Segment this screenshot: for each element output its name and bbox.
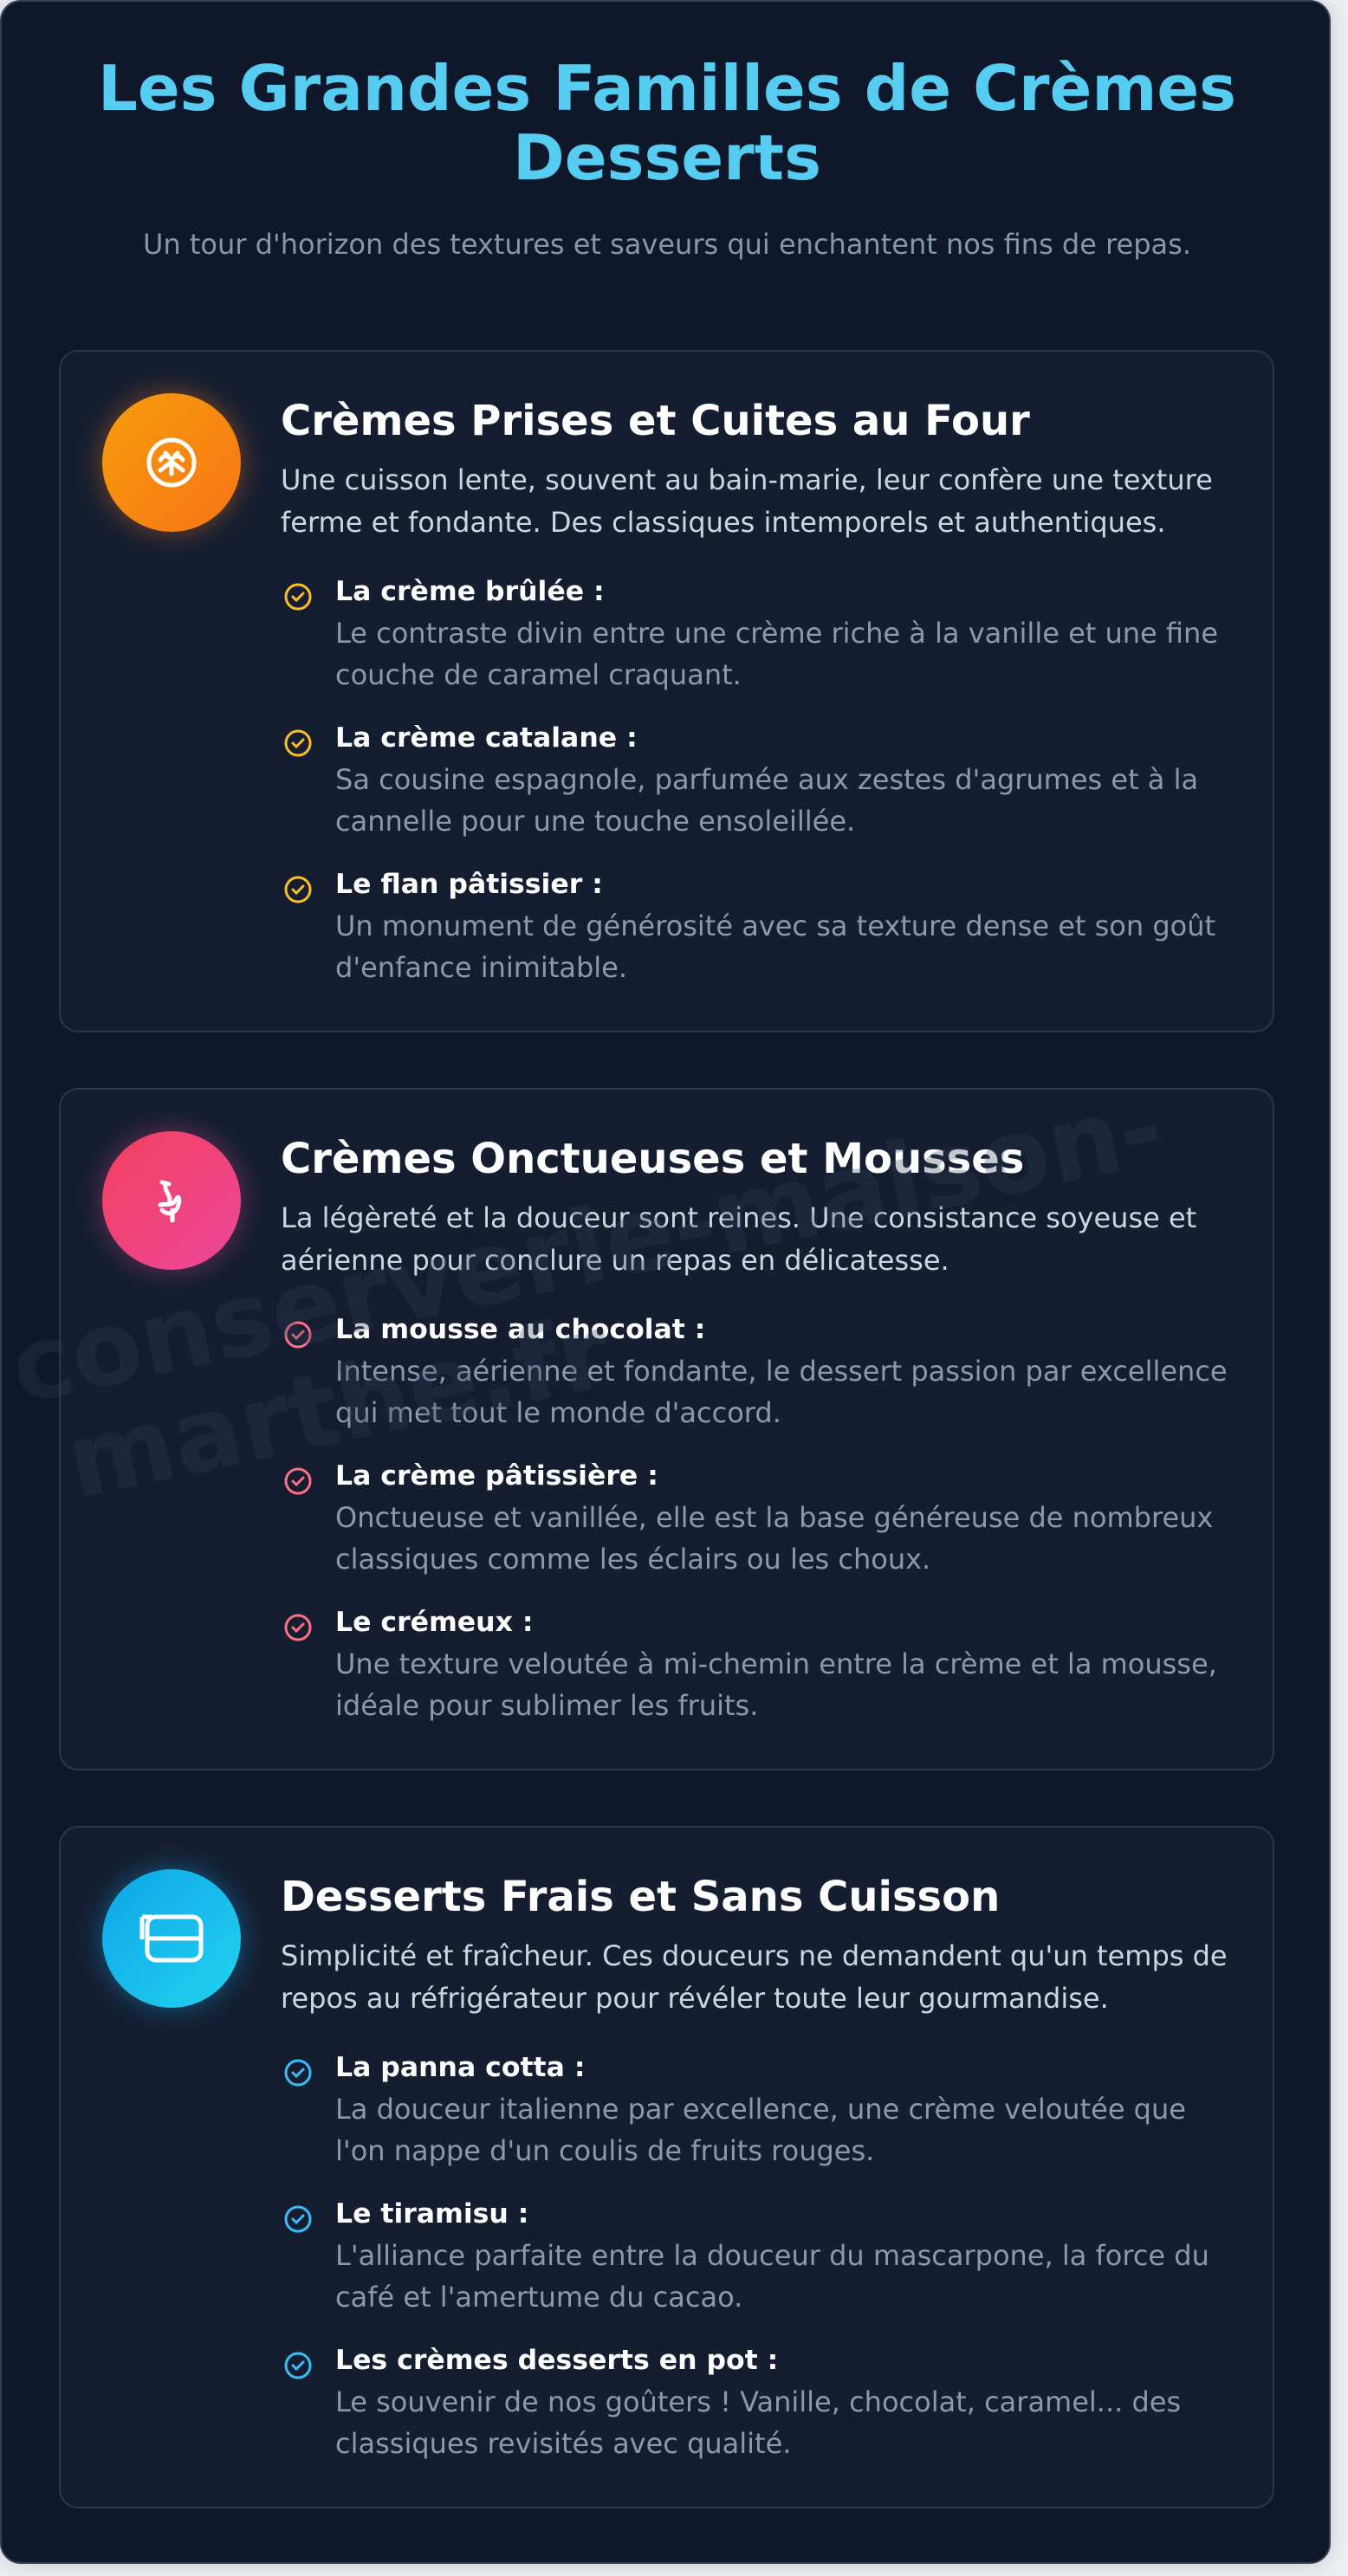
item: panna cotta: [284, 2052, 1186, 2167]
icon: baked cream: [102, 393, 241, 532]
item: tiramisu: Le tiramisu :: [335, 2198, 528, 2230]
item: cremes en pot: Les crèmes desserts en pot :: [335, 2345, 778, 2376]
item: tiramisu: [284, 2198, 1209, 2314]
panel: cremes onctueuses: [59, 1088, 1274, 1770]
icon: whisk: [102, 1131, 241, 1270]
item: creme catalane: La crème catalane :: [335, 722, 638, 754]
item: mousse chocolat: [284, 1314, 1228, 1429]
item: creme patissiere: La crème pâtissière :: [335, 1460, 658, 1492]
item: tiramisu: L'alliance parfaite entre la douceur du mascarpone, la force du café et l'amertume du cacao.: [335, 2239, 1209, 2314]
panel: desserts frais: [59, 1826, 1274, 2508]
watermark: conserverie-maison-: [0, 1066, 1174, 1427]
item: cremeux: Une texture veloutée à mi-chemin entre la crème et la mousse, idéale pour sublimer les fruits.: [335, 1647, 1217, 1722]
item: creme catalane: [284, 722, 1198, 838]
description: Une cuisson lente, souvent au bain-marie, leur confère une texture ferme et fondante. Des classiques intemporels et authentiques.: [281, 463, 1213, 539]
item: cremes en pot: Le souvenir de nos goûters ! Vanille, chocolat, caramel... des classiques revisités avec qualité.: [335, 2385, 1181, 2460]
description: La légèreté et la douceur sont reines. Une consistance soyeuse et aérienne pour conclure un repas en délicatesse.: [281, 1201, 1196, 1277]
title: Les Grandes Familles de Crèmes: [98, 52, 1236, 125]
title: Desserts: [513, 121, 821, 194]
item: flan: Le flan pâtissier :: [335, 869, 603, 900]
watermark: marthe.fr: [56, 1291, 620, 1522]
heading: Crèmes Prises et Cuites au Four: [281, 397, 1030, 445]
icon: fridge pot: [102, 1869, 241, 2008]
item: panna cotta: La panna cotta :: [335, 2052, 585, 2083]
heading: Crèmes Onctueuses et Mousses: [281, 1135, 1024, 1183]
heading: Desserts Frais et Sans Cuisson: [281, 1873, 1000, 1921]
panel: cremes prises: [59, 350, 1274, 1032]
item: flan: [284, 869, 1215, 984]
title: [98, 52, 1236, 194]
item: mousse chocolat: Intense, aérienne et fondante, le dessert passion par excellence qui met tout le monde d'accord.: [335, 1355, 1228, 1429]
item: creme patissiere: Onctueuse et vanillée, elle est la base généreuse de nombreux classiques comme les éclairs ou les choux.: [335, 1501, 1213, 1576]
item: panna cotta: La douceur italienne par excellence, une crème veloutée que l'on nappe d'un coulis de fruits rouges.: [335, 2093, 1186, 2167]
description: Simplicité et fraîcheur. Ces douceurs ne demandent qu'un temps de repos au réfrigérateur pour révéler toute leur gourmandise.: [281, 1939, 1228, 2015]
item: creme brulee: Le contraste divin entre une crème riche à la vanille et une fine couche de caramel craquant.: [335, 617, 1218, 691]
item: mousse chocolat: La mousse au chocolat :: [335, 1314, 705, 1345]
item: creme brulee: [284, 576, 1218, 691]
item: creme brulee: La crème brûlée :: [335, 576, 605, 607]
subtitle: Un tour d'horizon des textures et saveurs qui enchantent nos fins de repas.: [143, 228, 1191, 261]
item: cremeux: Le crémeux :: [335, 1607, 533, 1638]
item: flan: Un monument de générosité avec sa texture dense et son goût d'enfance inimitable.: [335, 909, 1215, 984]
item: cremes en pot: [284, 2345, 1181, 2460]
item: creme catalane: Sa cousine espagnole, parfumée aux zestes d'agrumes et à la cannelle pour une touche ensoleillée.: [335, 763, 1198, 838]
item: creme patissiere: [284, 1460, 1213, 1576]
item: cremeux: [284, 1607, 1217, 1722]
